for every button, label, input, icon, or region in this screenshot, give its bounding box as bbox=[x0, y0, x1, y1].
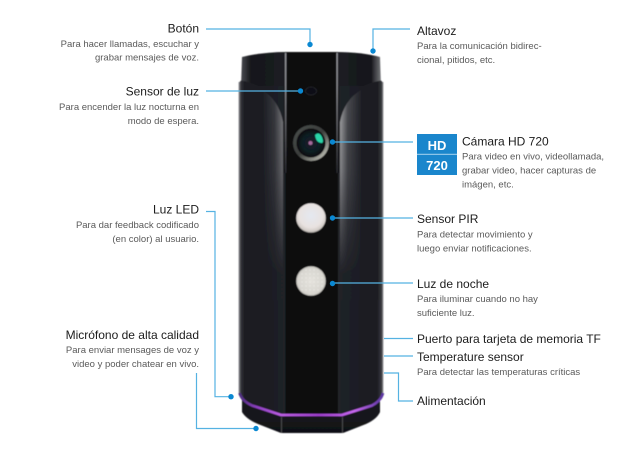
callout: Sensor PIR bbox=[330, 212, 533, 254]
night light bbox=[296, 266, 326, 296]
callout: Sensor de luz: Sensor de luz bbox=[126, 84, 199, 98]
callout: Luz LED bbox=[76, 202, 234, 399]
callout: Micrófono: Para enviar mensages de voz y bbox=[66, 345, 199, 356]
callout: Luz de noche: suficiente luz. bbox=[417, 308, 475, 319]
callout: Alimentación bbox=[384, 373, 486, 408]
callout: Alimentación: Alimentación bbox=[417, 394, 486, 408]
callout: Luz de noche: Para iluminar cuando no hay bbox=[417, 294, 538, 305]
callout: Luz de noche: Luz de noche bbox=[417, 277, 489, 291]
callout: Temperature sensor: Temperature sensor bbox=[417, 350, 524, 364]
callout: Botón: Botón bbox=[168, 22, 199, 36]
callout: Sensor PIR: Para detectar movimiento y bbox=[417, 230, 533, 240]
callout: Cámara HD 720: grabar video, hacer capturas de bbox=[462, 166, 596, 176]
body bbox=[238, 82, 384, 422]
callout: Luz LED: Luz LED bbox=[153, 202, 199, 216]
callout: Micrófono: Micrófono de alta calidad bbox=[66, 328, 199, 342]
callout: Micrófono: video y poder chatear en vivo. bbox=[72, 359, 199, 370]
right shoulder bbox=[340, 80, 384, 300]
callout: Altavoz bbox=[370, 24, 542, 66]
callout: Altavoz: Altavoz bbox=[417, 24, 456, 38]
device: security camera bbox=[238, 52, 384, 433]
callout: Sensor de luz bbox=[59, 84, 303, 127]
centre panel bbox=[285, 52, 338, 417]
callout: Puerto para tarjeta: Puerto para tarjeta de memoria TF bbox=[417, 332, 601, 346]
top cap bbox=[241, 52, 381, 86]
callout: Temperature sensor bbox=[384, 350, 580, 378]
camera lens bbox=[293, 125, 329, 161]
callout: Botón: grabar mensajes de voz. bbox=[95, 52, 199, 64]
base seams bbox=[282, 417, 342, 433]
callout: Luz LED: (en color) al usuario. bbox=[112, 234, 199, 245]
callout: Sensor de luz: modo de espera. bbox=[128, 116, 199, 127]
purple LED ring bbox=[240, 393, 383, 415]
HD 720 badge: 720 bbox=[426, 158, 448, 173]
callout: Altavoz: Para la comunicación bidirec- bbox=[417, 41, 542, 52]
left shoulder bbox=[238, 80, 283, 300]
HD 720 badge bbox=[417, 134, 457, 175]
callout: Cámara HD 720: Cámara HD 720 bbox=[462, 134, 549, 148]
HD 720 badge: HD bbox=[428, 138, 446, 153]
callout: Sensor PIR: Sensor PIR bbox=[417, 212, 479, 226]
base bbox=[242, 396, 380, 433]
callout: Sensor de luz: Para encender la luz nocturna en bbox=[59, 102, 199, 113]
callout: Luz LED: Para dar feedback codificado bbox=[76, 220, 199, 231]
callout: Altavoz: cional, pitidos, etc. bbox=[417, 55, 495, 66]
callout: Cámara HD 720 bbox=[330, 134, 604, 190]
callout: Cámara HD 720: imágen, etc. bbox=[462, 180, 514, 190]
callout: Micrófono bbox=[66, 328, 259, 431]
PIR sensor bbox=[296, 203, 326, 233]
callout: Luz de noche bbox=[330, 277, 538, 319]
callout: Temperature sensor: Para detectar las temperaturas críticas bbox=[417, 367, 580, 378]
callout: Cámara HD 720: Para video en vivo, videollamada, bbox=[462, 152, 604, 162]
callout: Sensor PIR: luego enviar notificaciones. bbox=[417, 244, 532, 254]
light sensor bbox=[306, 87, 316, 95]
callout: Botón bbox=[61, 22, 313, 64]
callout: Botón: Para hacer llamadas, escuchar y bbox=[61, 39, 199, 50]
